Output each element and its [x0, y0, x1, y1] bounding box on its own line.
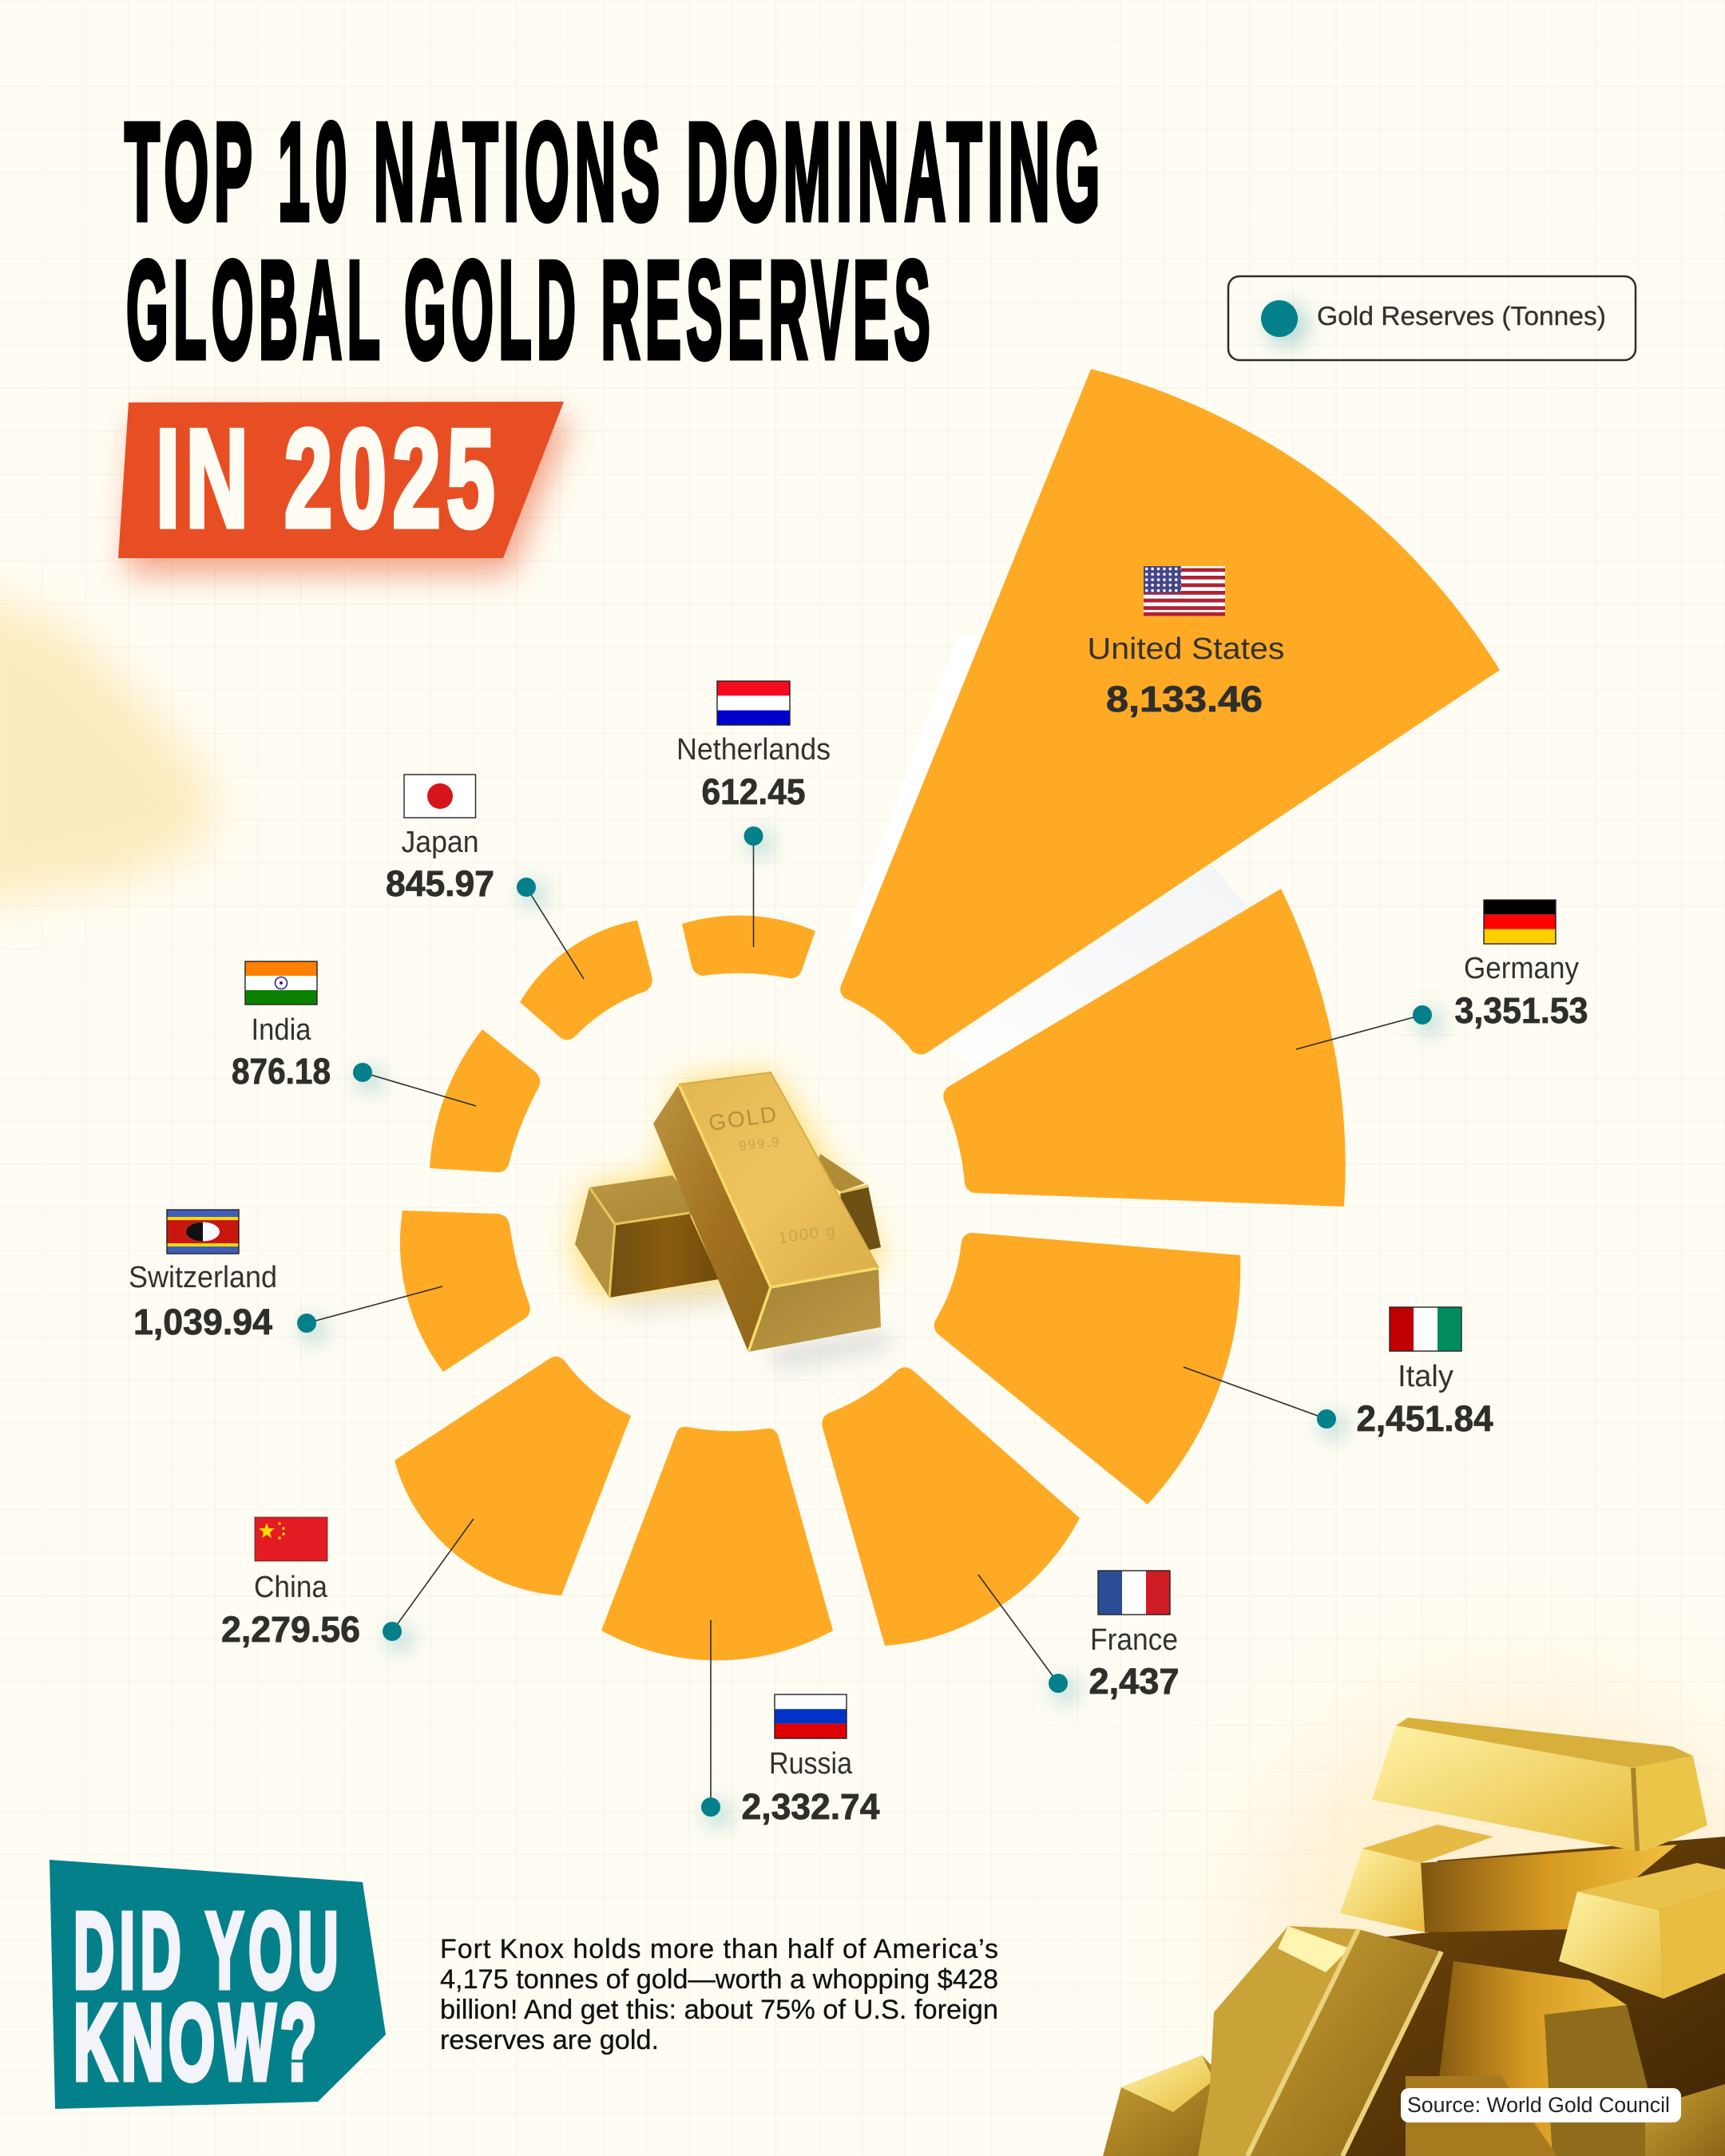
callout: Germany	[1296, 900, 1588, 1049]
source: Source: World Gold Council	[1407, 2093, 1670, 2117]
bar: large leaning	[1198, 1926, 1358, 2156]
callout: Switzerland: Switzerland	[129, 1261, 277, 1294]
flag: Russia	[775, 1694, 847, 1738]
segment: Netherlands	[682, 915, 815, 978]
callout: India: 876.18	[232, 1051, 331, 1092]
radial chart: gold reserves	[395, 369, 1500, 1660]
legend	[1228, 276, 1636, 360]
icon: centre gold bars	[575, 1072, 890, 1369]
callout: France: 2,437	[1089, 1661, 1179, 1702]
callout: Netherlands: 612.45	[701, 771, 805, 812]
bar: centre block	[1430, 1961, 1627, 2156]
callout: China	[221, 1517, 474, 1651]
callout: Germany: 3,351.53	[1455, 990, 1588, 1031]
back bar right	[815, 1154, 865, 1191]
flag: Netherlands	[717, 681, 790, 725]
callout: Switzerland	[129, 1210, 442, 1343]
did you know panel: KNOW?	[73, 1982, 321, 2102]
callout: China: 2,279.56	[221, 1609, 360, 1650]
callout: China: China	[254, 1571, 328, 1604]
bar: top	[1396, 1718, 1693, 1768]
back bar left	[589, 1175, 703, 1224]
flag: India	[245, 961, 317, 1005]
segment: United States	[840, 369, 1500, 1054]
callout: Netherlands	[676, 681, 831, 947]
segment: China	[395, 1357, 631, 1595]
callout: France: France	[1090, 1623, 1178, 1657]
flag: Japan	[404, 775, 476, 818]
engraving: GOLD	[707, 1101, 779, 1135]
callout: Italy	[1184, 1307, 1493, 1439]
front bar	[653, 1084, 771, 1352]
callout: Japan: 845.97	[386, 863, 494, 904]
callout: Russia: 2,332.74	[741, 1786, 880, 1827]
callouts	[129, 566, 1588, 1827]
flag: France	[1098, 1571, 1170, 1615]
year banner	[118, 400, 572, 574]
flag: Italy	[1390, 1307, 1461, 1351]
segment: Switzerland	[400, 1211, 530, 1372]
legend: Gold Reserves (Tonnes)	[1317, 301, 1606, 331]
fact text: reserves are gold.	[440, 2025, 659, 2055]
bar: bottom left	[1103, 2055, 1246, 2156]
callout: France	[978, 1571, 1179, 1703]
icon: pile of gold bars	[1103, 1718, 1725, 2156]
callout: Italy: Italy	[1398, 1360, 1453, 1393]
year banner: IN 2025	[156, 400, 501, 556]
icon: centre gold bars: 999.9	[738, 1134, 782, 1154]
segment: Italy	[934, 1233, 1240, 1504]
flag: Germany	[1484, 900, 1556, 944]
icon: centre gold bars: 1000 g	[777, 1222, 838, 1247]
segment: Germany	[943, 889, 1346, 1207]
did you know panel	[50, 1860, 386, 2109]
callout: Japan: Japan	[401, 826, 479, 859]
title	[125, 93, 1105, 387]
light bands behind segments	[845, 637, 1247, 1070]
fact text: billion! And get this: about 75% of U.S. foreign	[440, 1995, 998, 2025]
callout: United States: 8,133.46	[1106, 679, 1263, 719]
callout: India: India	[251, 1013, 311, 1047]
callout: United States: United States	[1088, 632, 1284, 666]
bar: right upper	[1577, 1863, 1725, 1910]
fact text	[440, 1934, 998, 2055]
did you know panel: DID YOU	[73, 1890, 343, 2011]
bar: second row	[1362, 1825, 1493, 1863]
callout: Russia: Russia	[769, 1747, 853, 1781]
segment: France	[822, 1367, 1080, 1646]
source	[1401, 2088, 1681, 2122]
callout: Switzerland: 1,039.94	[133, 1302, 272, 1342]
callout: Germany: Germany	[1464, 952, 1579, 985]
segment: India	[430, 1029, 540, 1172]
flag: China	[255, 1517, 327, 1561]
flag: Switzerland	[167, 1210, 239, 1254]
segment: Japan	[520, 920, 652, 1040]
callout: India	[232, 961, 476, 1106]
callout: Italy: 2,451.84	[1356, 1398, 1493, 1439]
fact text: 4,175 tonnes of gold—worth a whopping $428	[440, 1964, 998, 1995]
segment: Russia	[601, 1427, 833, 1660]
callout: Russia	[701, 1620, 880, 1827]
callout: United States	[1088, 566, 1284, 719]
flag: United States	[1144, 566, 1225, 616]
lower right dark mass	[1246, 1837, 1725, 2156]
fact text: Fort Knox holds more than half of America’s	[440, 1934, 998, 1964]
callout: Japan	[386, 775, 584, 979]
callout: Netherlands: Netherlands	[676, 733, 831, 767]
